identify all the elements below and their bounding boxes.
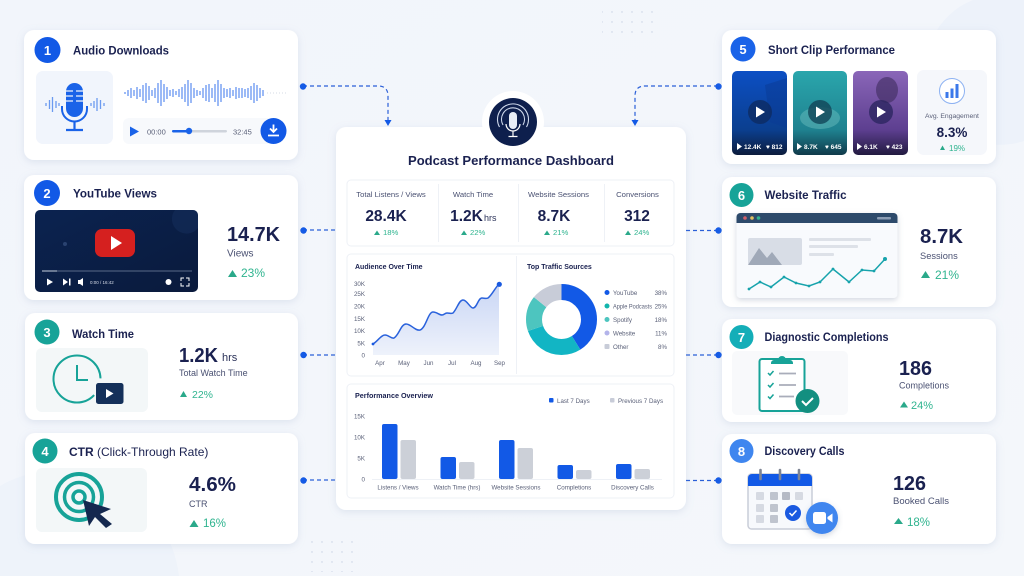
stat: sessions: Sessions [920,251,958,261]
kpi: website sessions: 21% [553,228,569,237]
line chart: audience over time: 5K [357,340,366,348]
kpi: total listens: 28.4K [365,208,407,225]
badge 1 [34,37,60,63]
donut chart: top traffic sources [527,264,667,351]
stat: ctr [189,473,236,530]
bar chart: performance overview [347,384,674,498]
bar chart: performance overview: Listens / Views [377,484,419,492]
heading: youtube views: YouTube Views [73,188,157,200]
bar chart: performance overview: Discovery Calls [611,484,654,492]
audio player: 32:45 [233,128,252,136]
clip thumbnail 1: 12.4K [744,144,762,151]
panel: dashboard [336,91,686,510]
stat: views: Views [227,248,254,260]
bar legend [549,398,663,405]
line chart: audience over time: Aug [470,360,482,367]
stat: ctr: CTR [189,499,208,509]
line chart: audience over time: 30K [354,281,366,288]
heading: diagnostic completions: Diagnostic Completions [764,332,888,344]
donut legend: 11% [655,330,667,338]
heading: ctr: CTR (Click-Through Rate) [69,445,208,459]
clip thumbnail 3: 6.1K [864,144,878,151]
kpi: total listens: Total Listens / Views [356,190,426,199]
icon: download button [260,118,286,144]
line chart: audience over time: Audience Over Time [355,264,423,271]
stat: views: 23% [241,266,265,280]
stat: sessions: 8.7K [920,225,963,248]
icon: calendar and video call [748,470,838,534]
line chart: audience over time [354,256,516,374]
clip thumbnail 2: 8.7K [804,144,818,151]
stat: views [227,223,280,280]
panel: diagnostic completions [722,319,996,422]
donut legend: Other [613,344,628,351]
badge 2: 2 [43,186,51,201]
stat: completions: 186 [899,357,932,380]
badge 3 [34,320,60,344]
avg engagement stat: 19% [949,144,965,153]
donut legend: Apple Podcasts [613,304,652,310]
clip thumbnail 1 [732,71,787,155]
stat: booked calls [893,472,949,529]
clip thumbnail 1: ♥ 812 [766,144,783,151]
stat: ctr: 4.6% [189,473,236,496]
stat: watch time: 1.2K [179,344,218,367]
badge 5: 5 [739,42,747,57]
donut legend: 38% [655,290,667,297]
connector: audio downloads to dashboard [300,83,392,126]
badge 7 [730,325,754,349]
clip thumbnail 2: ♥ 645 [825,144,842,151]
line chart: audience over time: Sep [494,360,506,367]
panel: short clip performance [722,30,996,164]
bar chart: performance overview: Completions [557,484,591,492]
bar legend: Last 7 Days [557,398,590,405]
badge 7: 7 [738,330,745,345]
donut legend: Spotify [613,317,633,324]
stat: watch time: 22% [192,389,213,401]
donut legend: Website [613,330,636,338]
panel: audio downloads [24,30,298,160]
stat: watch time [179,344,248,401]
kpi: watch time: hrs [484,213,497,223]
connectors: dashboard to right cards [686,227,722,484]
audio player: 00:00 [147,128,166,136]
heading: watch time: Watch Time [72,329,134,341]
stat: booked calls: 18% [907,517,930,529]
icon: clipboard [732,351,848,415]
heading: audio downloads: Audio Downloads [73,46,169,58]
bar chart: performance overview: 5K [357,456,366,462]
kpi: total listens [356,190,426,237]
avg engagement stat: 8.3% [937,125,967,140]
kpi: website sessions: 8.7K [538,208,571,225]
kpi strip [347,180,674,246]
video player thumbnail: 0:00 / 16:42 [90,280,114,285]
panel: watch time [25,313,298,420]
stat: sessions: 21% [935,268,959,282]
icon: clock and video [36,346,148,412]
kpi: watch time [450,190,497,237]
bar chart: performance overview: 15K [354,414,366,420]
badge 5 [730,36,756,62]
donut legend: YouTube [613,290,638,297]
waveform [125,80,263,106]
line chart: audience over time: Apr [375,360,385,367]
line chart: audience over time: Jun [424,360,434,367]
line chart: audience over time: 15K [354,316,366,323]
clip thumbnail 2 [793,71,847,155]
badge 3: 3 [43,325,51,340]
donut chart: top traffic sources: Top Traffic Sources [527,264,592,271]
badge 4 [32,438,58,464]
bar legend: Previous 7 Days [618,398,663,405]
bar chart: performance overview: Website Sessions [491,484,541,492]
line chart: audience over time: 10K [354,328,366,335]
badge 6: 6 [738,188,745,203]
panel: youtube views [24,175,298,300]
badge 8 [730,439,754,463]
kpi: conversions [616,190,659,237]
badge 6 [730,183,754,207]
dashboard title: Podcast Performance Dashboard [408,153,614,168]
heading: website traffic: Website Traffic [764,190,847,202]
badge 2 [34,180,60,206]
panel: discovery calls [722,434,996,544]
avg engagement stat: Avg. Engagement [925,113,979,120]
line chart: audience over time: 25K [354,291,366,298]
browser illustration [736,213,898,298]
stat: views: 14.7K [227,223,280,246]
line chart: audience over time: 20K [354,304,366,310]
bar chart: performance overview: 10K [354,434,366,442]
audio player [123,118,273,144]
video player thumbnail [35,210,198,292]
line chart: audience over time: 0 [362,352,366,360]
donut legend: 25% [655,304,667,310]
avg engagement stat [917,70,987,155]
kpi: watch time: 22% [470,228,486,237]
kpi: total listens: 18% [383,228,399,237]
badge 1: 1 [44,43,51,58]
connectors: left cards to dashboard [300,227,336,484]
icon: microphone [36,71,113,144]
donut legend: 8% [658,344,667,351]
line chart: audience over time: May [398,360,411,367]
panel: website traffic [722,177,996,307]
stat: completions [899,357,950,412]
kpi: conversions: 24% [634,228,650,237]
panel: ctr [25,433,298,544]
stat: completions: 24% [911,400,933,412]
connector: short clips to dashboard [632,83,722,126]
clip thumbnail 3 [853,71,908,155]
line chart: audience over time: Jul [448,360,456,367]
stat: sessions [920,225,963,282]
clip thumbnail 3: ♥ 423 [886,144,903,151]
dashboard podcast badge [482,91,544,153]
bar chart: performance overview: Watch Time (hrs) [434,484,480,492]
kpi: watch time: 1.2K [450,208,484,225]
kpi: watch time: Watch Time [453,190,493,199]
stat: booked calls: 126 [893,472,926,495]
heading: discovery calls: Discovery Calls [764,446,844,458]
donut legend [604,290,667,351]
stat: watch time: Total Watch Time [179,368,248,378]
kpi: website sessions [528,190,589,237]
kpi: website sessions: Website Sessions [528,190,589,199]
stat: watch time: hrs [222,352,238,364]
stat: ctr: 16% [203,518,226,530]
bar chart: performance overview: Performance Overview [355,391,433,400]
kpi: conversions: Conversions [616,190,659,199]
bar chart: performance overview: 0 [362,476,366,484]
heading: short clip performance: Short Clip Performance [768,45,895,57]
icon: target and cursor [36,468,147,532]
stat: completions: Completions [899,380,950,390]
badge 8: 8 [738,444,745,459]
donut legend: 18% [655,317,667,324]
kpi: conversions: 312 [624,208,650,225]
stat: booked calls: Booked Calls [893,496,949,507]
badge 4: 4 [41,444,49,459]
chart panel frame [347,254,674,376]
